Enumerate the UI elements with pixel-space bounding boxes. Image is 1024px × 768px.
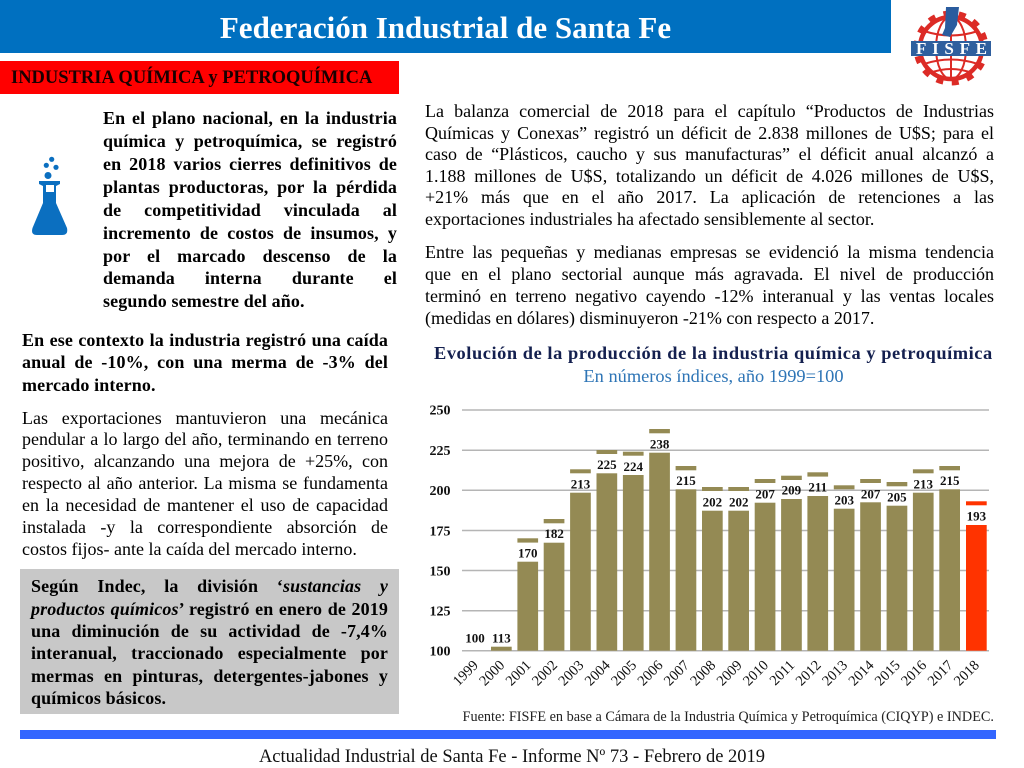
x axis labels: 2006 bbox=[635, 658, 666, 689]
text block: intro bold: demanda interna durante el bbox=[103, 268, 397, 288]
value labels: 238 bbox=[650, 436, 670, 452]
text block: trade balance: +21% más que en el año 2017. La aplicación de retenciones a las bbox=[425, 187, 994, 207]
text block: intro bold: por el marcado descenso de la bbox=[103, 246, 397, 266]
text block: exports bbox=[22, 408, 388, 559]
value labels: 100 bbox=[465, 630, 485, 646]
x axis labels: 2016 bbox=[898, 658, 930, 689]
x axis labels: 2015 bbox=[872, 658, 904, 689]
panel: Indec callout: químicos básicos. bbox=[31, 688, 166, 708]
value labels: 207 bbox=[755, 486, 775, 502]
x axis labels: 2003 bbox=[556, 658, 587, 689]
icon: FISFE logo bbox=[911, 7, 991, 86]
text block: exports: respecto al año anterior. La misma se fundamenta bbox=[22, 473, 388, 493]
value labels: 203 bbox=[834, 492, 854, 508]
panel: Indec callout: mermas en pinturas, detergentes-jabones y bbox=[31, 666, 388, 686]
y axis labels: 150 bbox=[430, 564, 450, 580]
value labels: 215 bbox=[676, 473, 696, 488]
x axis labels: 2005 bbox=[608, 658, 640, 689]
footer text: Actualidad Industrial de Santa Fe - Informe Nº 73 - Febrero de 2019 bbox=[259, 747, 765, 767]
x axis labels: 2012 bbox=[793, 658, 825, 689]
icon: flask bbox=[32, 156, 68, 235]
value labels: 193 bbox=[967, 508, 987, 524]
text block: trade balance: caso de “Plásticos, caucho y sus manufacturas” el déficit anual alcanzó a bbox=[425, 144, 994, 164]
text block: intro bold: de competitividad vinculada al bbox=[103, 200, 397, 220]
x axis labels: 1999 bbox=[450, 658, 482, 689]
y axis labels: 125 bbox=[430, 604, 450, 620]
value labels: 213 bbox=[571, 476, 591, 492]
text block: exports: instalada -y la correspondiente absorción de bbox=[22, 517, 388, 537]
y axis labels: 225 bbox=[430, 444, 450, 459]
text block: SMEs: Entre las pequeñas y medianas empresas se evidenció la misma tendencia bbox=[425, 242, 994, 262]
text block: SMEs: terminó en terreno negativo cayendo -12% interanual y las ventas locales bbox=[425, 286, 994, 306]
text block: intro bold: En el plano nacional, en la industria bbox=[103, 108, 397, 128]
text block: intro bold bbox=[103, 108, 397, 311]
x axis labels: 2004 bbox=[582, 657, 614, 689]
bar chart bbox=[430, 404, 989, 689]
text block: SMEs: que en el plano sectorial aunque más agravada. El nivel de producción bbox=[425, 264, 994, 284]
x axis labels bbox=[450, 657, 983, 689]
text block: annual drop: mercado interno. bbox=[22, 375, 156, 395]
highlighted bar 2018 bbox=[966, 501, 987, 651]
text block: trade balance: Químicas y Conexas” registró un déficit de 2.838 millones de U$S; para el bbox=[425, 123, 994, 143]
value labels: 224 bbox=[623, 459, 643, 474]
bars bbox=[491, 429, 960, 651]
text block: exports: costos fijos- ante la caída del mercado interno. bbox=[22, 539, 357, 559]
text block: intro bold: química y petroquímica, se registró bbox=[103, 131, 397, 151]
panel: Indec callout: interanual, traccionado especialmente por bbox=[31, 643, 388, 663]
x axis labels: 2013 bbox=[819, 658, 851, 689]
text block: annual drop: En ese contexto la industria registró una caída bbox=[22, 330, 388, 350]
x axis labels: 2000 bbox=[476, 658, 508, 689]
x axis labels: 2009 bbox=[714, 658, 746, 689]
x axis labels: 2017 bbox=[925, 658, 957, 689]
text block: exports: positivo, alcanzando una mejora de +25%, con bbox=[22, 451, 388, 471]
text block: trade balance: La balanza comercial de 2018 para el capítulo “Productos de Industrias bbox=[425, 101, 994, 121]
value labels: 182 bbox=[544, 526, 564, 541]
text block: SMEs: (medidas en dólares) disminuyeron -21% con respecto a 2017. bbox=[425, 308, 874, 328]
value labels: 213 bbox=[914, 476, 934, 492]
text block: annual drop bbox=[22, 330, 388, 395]
chart title: Evolución de la producción de la industria química y petroquímica bbox=[434, 343, 993, 363]
panel: Indec callout: productos químicos’ registró en enero de 2019 bbox=[31, 599, 388, 619]
x axis labels: 2011 bbox=[767, 658, 798, 689]
text block: intro bold: en 2018 varios cierres definitivos de bbox=[103, 154, 397, 174]
text block: intro bold: incremento de costos de insumos, y bbox=[103, 223, 397, 243]
y axis labels: 200 bbox=[430, 484, 450, 499]
x axis labels: 2018 bbox=[951, 658, 983, 689]
y axis labels: 100 bbox=[430, 644, 450, 660]
value labels: 170 bbox=[518, 546, 538, 560]
logo band bbox=[911, 41, 991, 56]
x axis labels: 2014 bbox=[846, 657, 878, 689]
text block: intro bold: plantas productoras, por la pérdida bbox=[103, 177, 397, 197]
value labels: 202 bbox=[729, 494, 748, 510]
text block: intro bold: segundo semestre del año. bbox=[103, 291, 305, 311]
text block: exports: pendular a lo largo del año, terminando en terreno bbox=[22, 429, 388, 449]
value labels: 225 bbox=[597, 457, 617, 472]
panel: Indec callout: Según Indec, la división ‘sustancias y bbox=[31, 576, 388, 596]
value labels: 215 bbox=[940, 473, 960, 488]
x axis labels: 2008 bbox=[687, 658, 719, 689]
value labels: 113 bbox=[492, 630, 511, 646]
x axis labels: 2002 bbox=[529, 658, 561, 689]
panel: Indec callout bbox=[20, 569, 399, 714]
text block: SMEs bbox=[425, 242, 994, 328]
value labels: 202 bbox=[703, 494, 722, 510]
source note: Fuente: FISFE en base a Cámara de la Industria Química y Petroquímica (CIQYP) e INDEC. bbox=[463, 709, 994, 725]
header bar bbox=[0, 0, 891, 53]
text block: exports: en la necesidad de mantener el uso de capacidad bbox=[22, 495, 388, 515]
y axis labels bbox=[430, 404, 450, 660]
logo text: FISFE bbox=[916, 39, 987, 58]
y axis labels: 250 bbox=[430, 404, 450, 418]
chart subtitle: En números índices, año 1999=100 bbox=[583, 366, 844, 386]
text block: annual drop: anual de -10%, con una merma de -3% del bbox=[22, 352, 388, 372]
y axis labels: 175 bbox=[430, 524, 450, 540]
section heading: INDUSTRIA QUÍMICA y PETROQUÍMICA bbox=[11, 68, 372, 88]
value labels bbox=[465, 436, 987, 646]
title: Federación Industrial de Santa Fe bbox=[220, 10, 671, 45]
value labels: 205 bbox=[887, 490, 907, 504]
icon: Santa Fe province shape bbox=[942, 7, 959, 37]
panel: Indec callout: una diminución de su actividad de -7,4% bbox=[31, 621, 388, 641]
text block: trade balance bbox=[425, 101, 994, 229]
text block: trade balance: exportaciones industriales ha afectado sensiblemente al sector. bbox=[425, 209, 874, 229]
footer bar bbox=[20, 730, 996, 739]
x axis labels: 2001 bbox=[503, 658, 535, 689]
section heading bbox=[0, 61, 399, 94]
text block: exports: Las exportaciones mantuvieron una mecánica bbox=[22, 408, 388, 428]
value labels: 211 bbox=[808, 480, 827, 494]
text block: trade balance: 1.188 millones de U$S, totalizando un déficit de 4.026 millones de U$S, bbox=[425, 166, 994, 186]
x axis labels: 2007 bbox=[661, 658, 693, 689]
x axis labels: 2010 bbox=[740, 658, 772, 689]
value labels: 207 bbox=[861, 486, 881, 502]
value labels: 209 bbox=[782, 482, 802, 498]
